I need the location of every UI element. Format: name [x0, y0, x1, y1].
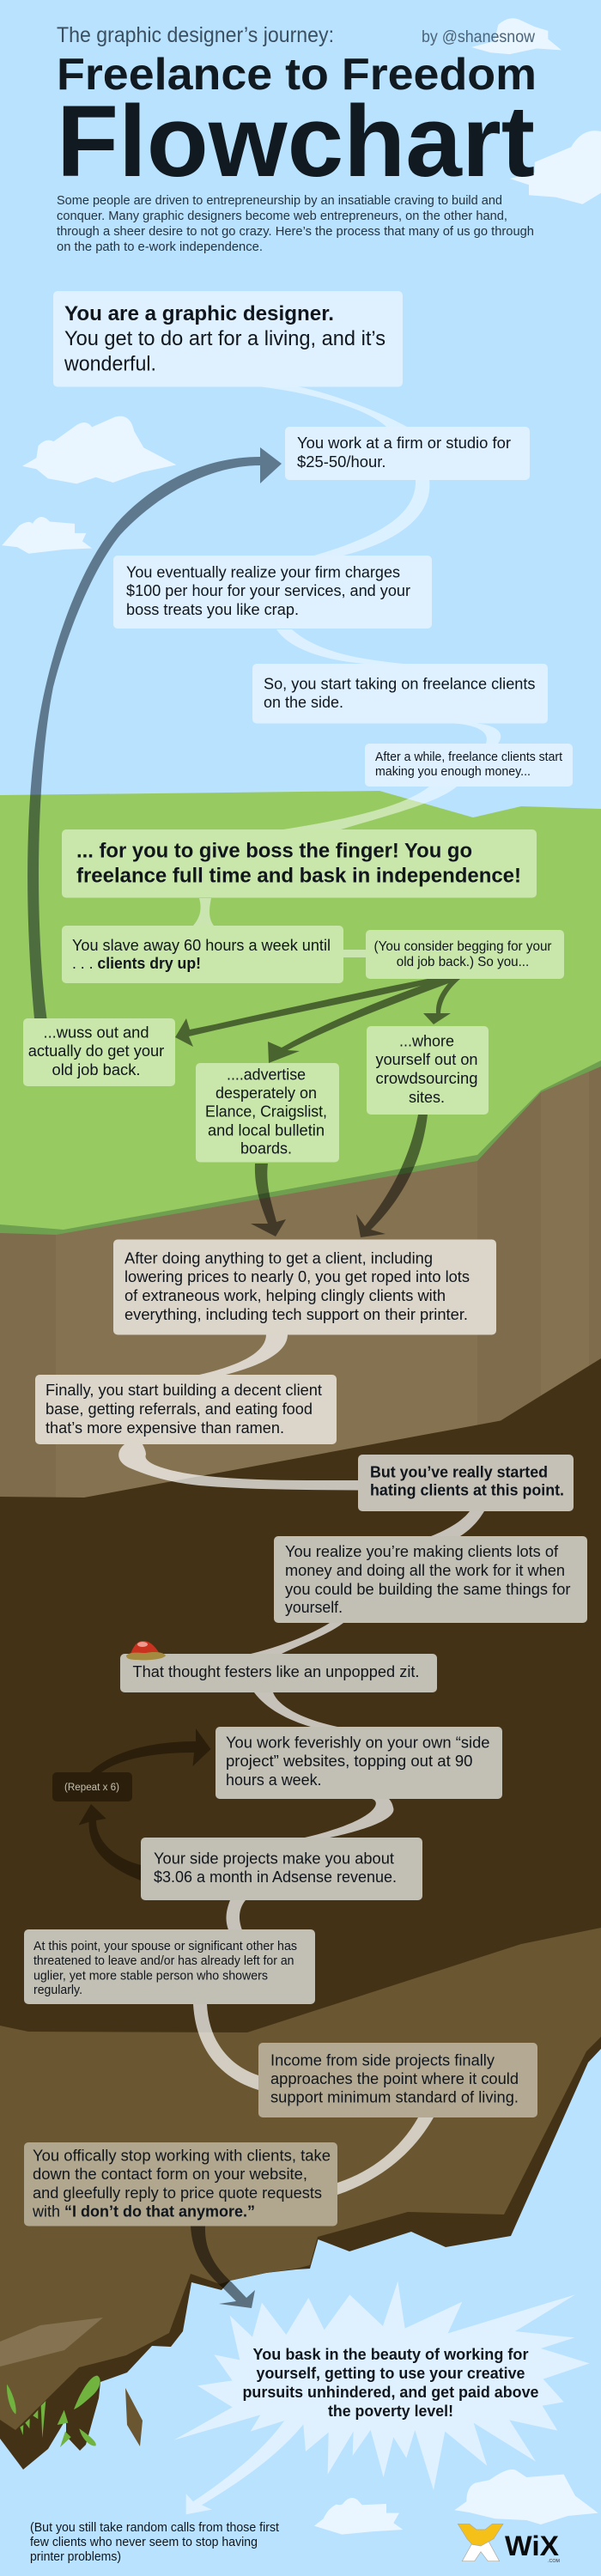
step: hating clients: hating clients at this point.: [370, 1482, 564, 1499]
step: firm charges: $100 per hour for your services, and your: [126, 582, 410, 599]
option: advertise desperately: ....advertise: [227, 1066, 306, 1084]
connector ribbons: earth section: [118, 1334, 484, 2195]
option: crowdsourcing sites: crowdsourcing: [376, 1070, 477, 1087]
terrain: earth shading stripes: [0, 1066, 601, 1511]
option: advertise desperately: Elance, Craigslist,: [205, 1103, 327, 1120]
option: wuss out: old job back.: [52, 1061, 141, 1078]
burst: final result: yourself, getting to use your creative: [256, 2365, 525, 2382]
burst: final result: the poverty level!: [328, 2403, 453, 2420]
logo: Wix: WiX: [505, 2530, 560, 2561]
step: spouse threatened to leave: At this point, your spouse or significant other has: [33, 1939, 297, 1953]
intro paragraph: conquer. Many graphic designers become web entrepreneurs, on the other hand,: [57, 209, 507, 223]
step: firm charges: boss treats you like crap.: [126, 601, 299, 618]
terrain: light brown earth: [0, 1066, 601, 1546]
step: roped into extraneous work: everything, including tech support on their printer.: [124, 1306, 468, 1323]
option: wuss out: ...wuss out and: [43, 1024, 149, 1041]
step: enough money: After a while, freelance clients start: [375, 750, 563, 764]
step: unpopped zit: That thought festers like an unpopped zit.: [132, 1663, 419, 1680]
terrain: dark brown earth and cliff lip: [0, 1358, 601, 2470]
step: decent client base: [35, 1375, 337, 1444]
arrow: repeat to side project: [90, 1728, 211, 1772]
step: side project: hours a week.: [226, 1771, 321, 1789]
step: firm charges: [113, 556, 432, 629]
step: making clients money: yourself.: [285, 1599, 343, 1616]
option: crowdsourcing sites: yourself out on: [376, 1051, 477, 1068]
option: wuss out: actually do get your: [28, 1042, 164, 1060]
step: making clients money: money and doing all the work for it when: [285, 1562, 565, 1579]
burst tail arrow to closing note: [186, 2420, 303, 2514]
step: enough money: making you enough money...: [375, 764, 531, 779]
terrain: green hill: [0, 791, 601, 1374]
option: crowdsourcing sites: sites.: [409, 1089, 445, 1106]
terrain: floating rock: [125, 2388, 143, 2446]
step: enough money: [365, 744, 573, 787]
burst: final result: pursuits unhindered, and get paid above: [242, 2384, 539, 2401]
closing note: printer problems): [30, 2549, 121, 2564]
clouds: upper sky: [2, 18, 601, 554]
step: stop working with clients: with “I don’t do that anymore.”: [32, 2203, 255, 2221]
step: work at a firm: $25-50/hour.: [297, 453, 386, 471]
step: income approaches living standard: support minimum standard of living.: [270, 2088, 519, 2105]
step: making clients money: You realize you’re making clients lots of: [285, 1543, 559, 1560]
step: consider begging: (You consider begging for your: [374, 939, 552, 954]
step: roped into extraneous work: [113, 1240, 496, 1334]
step: you are a graphic designer: wonderful.: [64, 352, 156, 376]
step: adsense revenue: $3.06 a month in Adsense revenue.: [154, 1868, 397, 1886]
logo: Wix: .COM: [548, 2559, 560, 2564]
step: unpopped zit: [120, 1654, 437, 1692]
grass tufts under the cliff: [7, 2376, 100, 2447]
step: you are a graphic designer: You get to do art for a living, and it’s: [64, 327, 385, 350]
step: adsense revenue: Your side projects make you about: [154, 1850, 394, 1867]
step: give boss the finger: freelance full time and bask in independence!: [76, 864, 521, 888]
step: side project: project” websites, topping out at 90: [226, 1753, 472, 1770]
step: decent client base: base, getting referrals, and eating food: [46, 1400, 313, 1418]
step: making clients money: you could be building the same things for: [285, 1581, 570, 1598]
closing note: [30, 2520, 280, 2564]
step: firm charges: You eventually realize your firm charges: [126, 563, 400, 580]
step: stop working with clients: You offically stop working with clients, take: [33, 2147, 331, 2164]
step: freelance on the side: So, you start taking on freelance clients: [264, 675, 536, 692]
option: advertise desperately: boards.: [240, 1140, 292, 1157]
closing note: (But you still take random calls from those first: [30, 2520, 280, 2535]
step: income approaches living standard: approaches the point where it could: [270, 2070, 519, 2087]
option: crowdsourcing sites: ...whore: [399, 1032, 454, 1049]
subtitle: The graphic designer’s journey:: [57, 23, 334, 47]
terrain: mid brown rock: [0, 1928, 601, 2430]
step: give boss the finger: ... for you to give boss the finger! You go: [76, 840, 472, 862]
burst: final result: You bask in the beauty of working for: [252, 2346, 529, 2363]
step: give boss the finger: [62, 829, 537, 898]
step: income approaches living standard: [258, 2043, 537, 2117]
terrain: rock highlight: [0, 2318, 103, 2366]
label: repeat x 6: (Repeat x 6): [64, 1783, 119, 1793]
arrow: adsense back to repeat: [79, 1804, 141, 1880]
step: decent client base: that’s more expensive than ramen.: [46, 1419, 284, 1437]
option: wuss out: [23, 1018, 175, 1086]
step: work at a firm: [285, 427, 530, 480]
arrow: cliff edge to final burst: [191, 2226, 255, 2308]
step: roped into extraneous work: lowering prices to nearly 0, you get roped into lots: [124, 1268, 470, 1285]
option: advertise desperately: [196, 1063, 339, 1163]
byline: by @shanesnow: [422, 28, 535, 46]
step: consider begging: [366, 930, 564, 979]
step: stop working with clients: and gleefully reply to price quote requests: [33, 2184, 322, 2202]
label: repeat x 6: [52, 1772, 132, 1801]
closing note: few clients who never seem to stop having: [30, 2535, 258, 2549]
step: spouse threatened to leave: regularly.: [33, 1983, 82, 1997]
step: clients dry up: [62, 926, 343, 983]
step: you are a graphic designer: [53, 291, 403, 386]
step: side project: [216, 1727, 502, 1799]
arrows: three branch options: [175, 978, 460, 1237]
logo: Wix: [458, 2524, 560, 2564]
step: adsense revenue: [141, 1838, 422, 1900]
intro paragraph: on the path to e-work independence.: [57, 240, 263, 254]
option: advertise desperately: and local bulletin: [208, 1121, 325, 1139]
step: decent client base: Finally, you start building a decent client: [46, 1382, 322, 1399]
title line two: Flowchart: [57, 85, 535, 198]
step: freelance on the side: on the side.: [264, 694, 343, 711]
step: spouse threatened to leave: [24, 1929, 315, 2004]
step: roped into extraneous work: of extraneous work, helping clingly clients with: [124, 1287, 446, 1304]
step: you are a graphic designer: You are a graphic designer.: [64, 302, 334, 325]
icon: zit: [126, 1641, 166, 1660]
step: clients dry up: You slave away 60 hours a week until: [72, 937, 331, 954]
step: stop working with clients: down the contact form on your website,: [33, 2166, 307, 2183]
step: making clients money: [274, 1536, 587, 1623]
option: advertise desperately: desperately on: [216, 1084, 317, 1102]
connector ribbons: sky section: [193, 386, 501, 957]
step: side project: You work feverishly on your own “side: [226, 1735, 489, 1752]
step: income approaches living standard: Income from side projects finally: [270, 2052, 495, 2069]
arrow: loop back to firm job: [27, 447, 282, 1018]
step: consider begging: old job back.) So you...: [397, 955, 529, 969]
step: spouse threatened to leave: threatened to leave and/or has already left for an: [33, 1953, 294, 1968]
intro paragraph: Some people are driven to entrepreneurship by an insatiable craving to build and: [57, 193, 502, 208]
intro paragraph: through a sheer desire to not go crazy. Here’s the process that many of us go through: [57, 224, 534, 239]
terrain: grass edge: [0, 1060, 601, 1288]
step: work at a firm: You work at a firm or studio for: [297, 434, 511, 452]
step: hating clients: But you’ve really started: [370, 1463, 548, 1480]
step: stop working with clients: [24, 2142, 337, 2226]
step: spouse threatened to leave: uglier, yet more stable person who showers: [33, 1968, 268, 1984]
option: crowdsourcing sites: [367, 1026, 489, 1115]
burst: final result: [174, 2281, 590, 2490]
title line one: Freelance to Freedom: [57, 50, 537, 100]
step: roped into extraneous work: After doing anything to get a client, including: [124, 1250, 433, 1267]
step: hating clients: [358, 1455, 574, 1511]
intro paragraph: [57, 193, 534, 254]
step: freelance on the side: [252, 664, 548, 723]
step: clients dry up: . . . clients dry up!: [72, 955, 201, 972]
clouds: bottom sky: [314, 2470, 598, 2535]
